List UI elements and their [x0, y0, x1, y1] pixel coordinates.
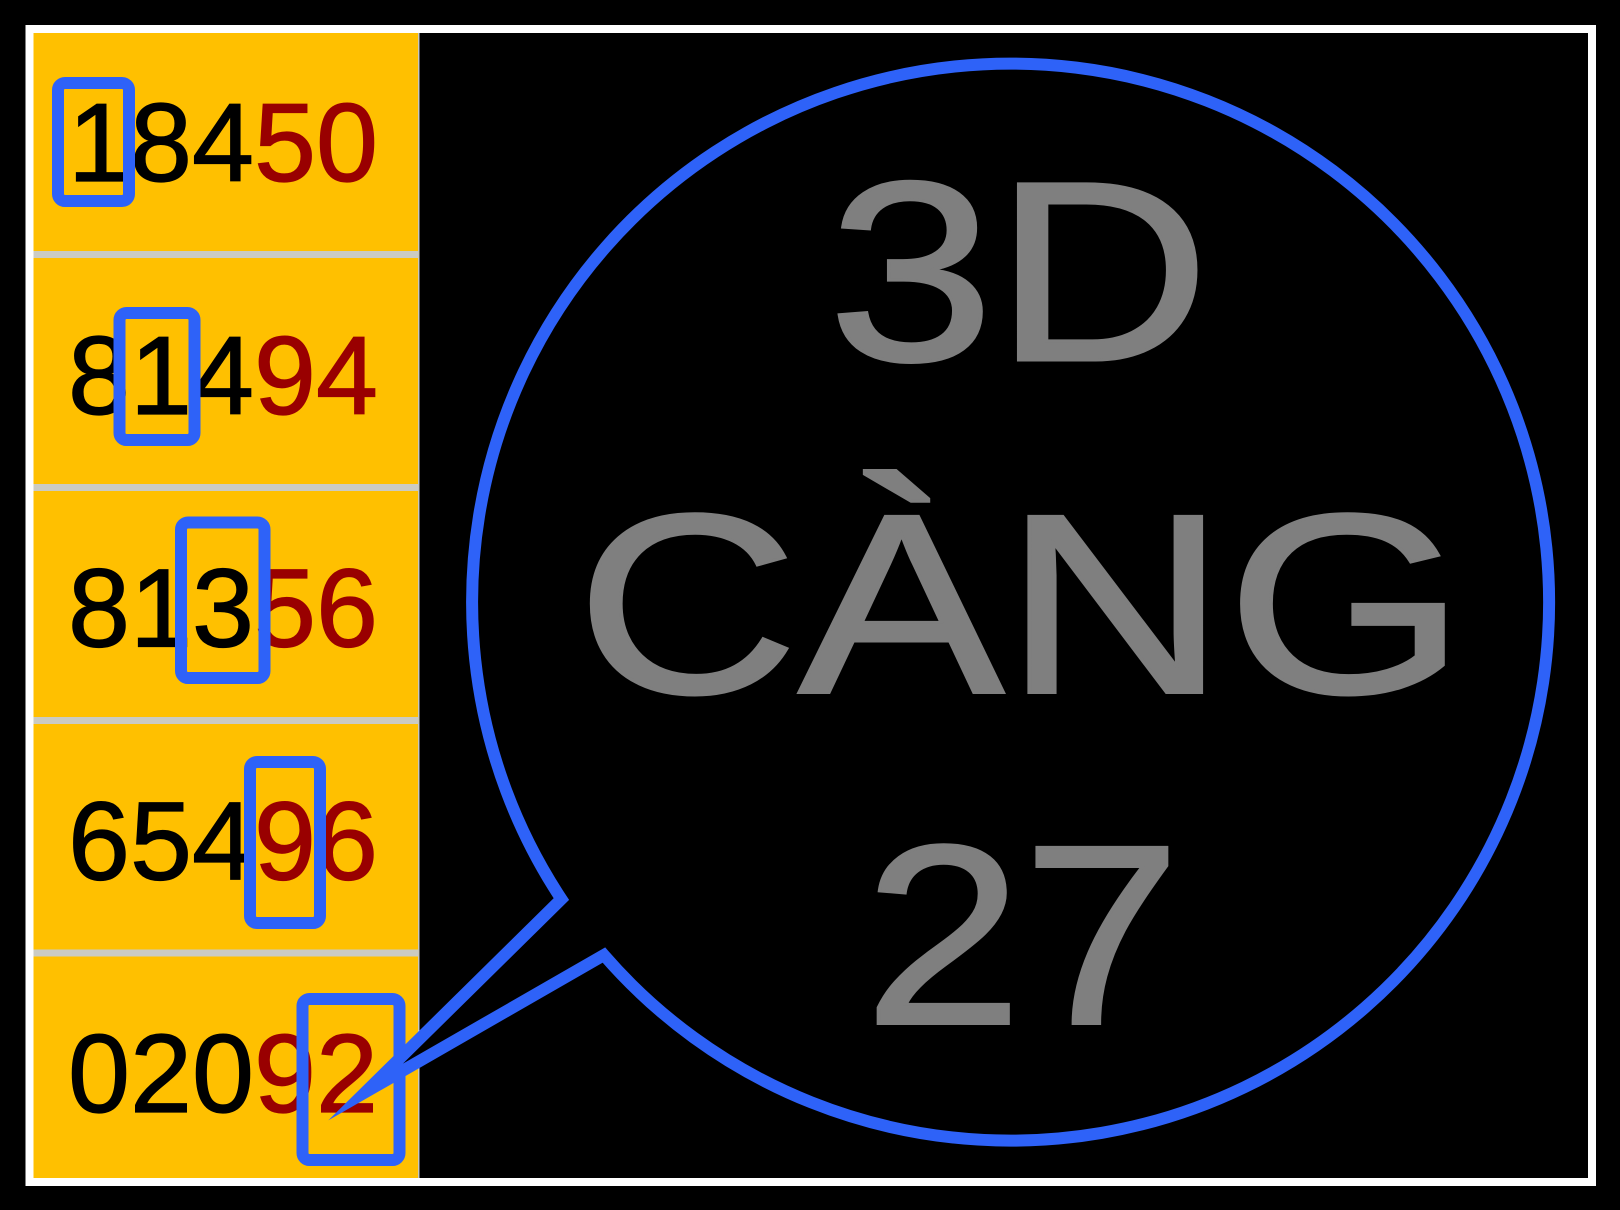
highlight box: digit 1 of row 1 [58, 83, 129, 201]
callout text: CÀNG: CÀNG [576, 462, 1466, 748]
highlight box: digit 3 of row 3 [181, 522, 264, 678]
number row 4: 65496: 65496 [68, 779, 378, 903]
number row 5: 02092: 02092 [68, 1012, 378, 1136]
number row 2: 81494: 81494 [68, 314, 378, 438]
callout text: 27: 27 [864, 792, 1181, 1078]
highlight box: digit 5 of row 5 [302, 999, 400, 1160]
panel: number column [34, 33, 420, 1178]
highlight box: digit 4 of row 4 [250, 762, 320, 923]
speech bubble callout [366, 64, 1549, 1141]
number row 3: 81356: 81356 [68, 546, 378, 670]
number row 1: 18450: 18450 [68, 81, 378, 205]
callout text: 3D: 3D [828, 129, 1210, 415]
highlight box: digit 2 of row 2 [120, 313, 194, 440]
